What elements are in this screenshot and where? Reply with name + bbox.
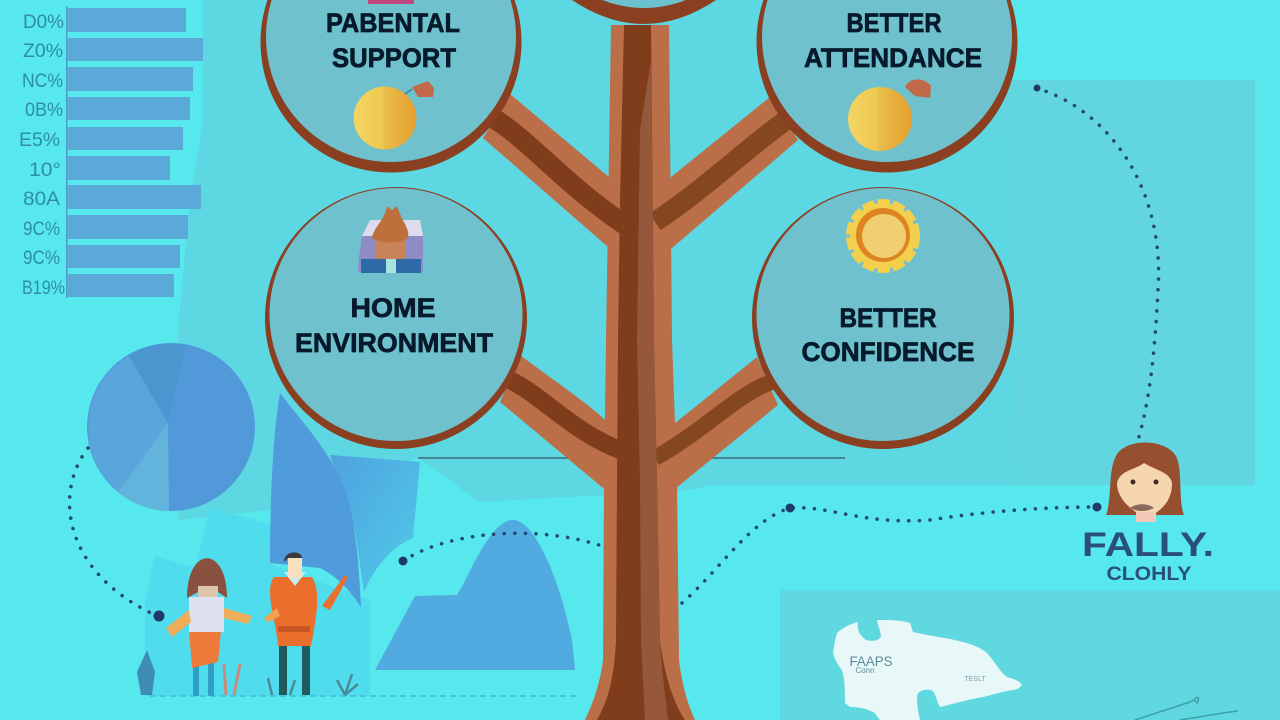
circle: top node <box>572 0 716 24</box>
avatar: woman <box>1106 442 1184 522</box>
brand text: CLOHLY <box>1106 564 1192 585</box>
map shape: Conn <box>855 666 875 675</box>
heading: home environment: HOME <box>350 293 436 323</box>
icon: golden ball <box>354 81 434 150</box>
bar labels: 9C% <box>23 248 60 269</box>
map shape <box>833 620 1022 720</box>
icon: golden ball <box>848 79 931 151</box>
heading: parental support: SUPPORT <box>332 43 456 73</box>
icon: book fragment <box>368 0 414 4</box>
chart: ghost hills <box>145 508 370 696</box>
ground line <box>150 695 580 697</box>
heading: better confidence: CONFIDENCE <box>802 337 974 367</box>
bars <box>67 8 203 297</box>
heading: better attendance: BETTER <box>846 8 942 38</box>
bar labels: 9C% <box>23 219 60 240</box>
trunk base <box>585 25 695 720</box>
bar labels: 0B% <box>25 100 63 121</box>
horizon line <box>418 457 845 459</box>
map labels: FAAPS <box>850 653 892 669</box>
branches <box>483 94 798 488</box>
heading: parental support: PABENTAL <box>326 8 460 38</box>
icon: golden badge <box>850 203 916 269</box>
map shape: TESLT <box>964 676 986 683</box>
bar labels: Z0% <box>23 41 63 62</box>
plants <box>137 650 358 695</box>
dotted connectors <box>70 88 1159 615</box>
heading: better confidence: BETTER <box>840 303 936 333</box>
circle: home environment <box>265 187 527 449</box>
bar labels: D0% <box>23 12 64 33</box>
heading: better attendance: ATTENDANCE <box>804 43 982 73</box>
figure: man <box>264 552 348 695</box>
brand text <box>1082 526 1214 585</box>
figure: girl <box>166 558 252 696</box>
bar labels: 80A <box>23 189 60 210</box>
bar labels: B19% <box>22 278 65 299</box>
brand text: FALLY. <box>1082 526 1214 564</box>
icon: person at home <box>358 206 423 273</box>
bar labels: 10° <box>29 160 61 181</box>
tree <box>483 25 798 720</box>
bar labels: E5% <box>19 130 60 151</box>
trunk highlight <box>637 60 668 720</box>
trunk core <box>597 25 685 720</box>
circle: better attendance <box>756 0 1018 172</box>
pie chart <box>87 343 255 511</box>
circle: parental support <box>260 0 522 172</box>
pins <box>1135 697 1238 720</box>
heading: better attendance <box>804 8 982 73</box>
heading: home environment: ENVIRONMENT <box>295 328 493 358</box>
heading: parental support <box>326 8 460 73</box>
heading: better confidence <box>802 303 974 367</box>
bar chart <box>19 6 203 299</box>
connector end dots <box>154 84 1102 622</box>
chart: blue mountains <box>270 393 575 670</box>
bar labels <box>19 12 65 299</box>
circle: better confidence <box>752 187 1014 449</box>
heading: home environment <box>295 293 493 358</box>
bar labels: NC% <box>22 71 63 92</box>
